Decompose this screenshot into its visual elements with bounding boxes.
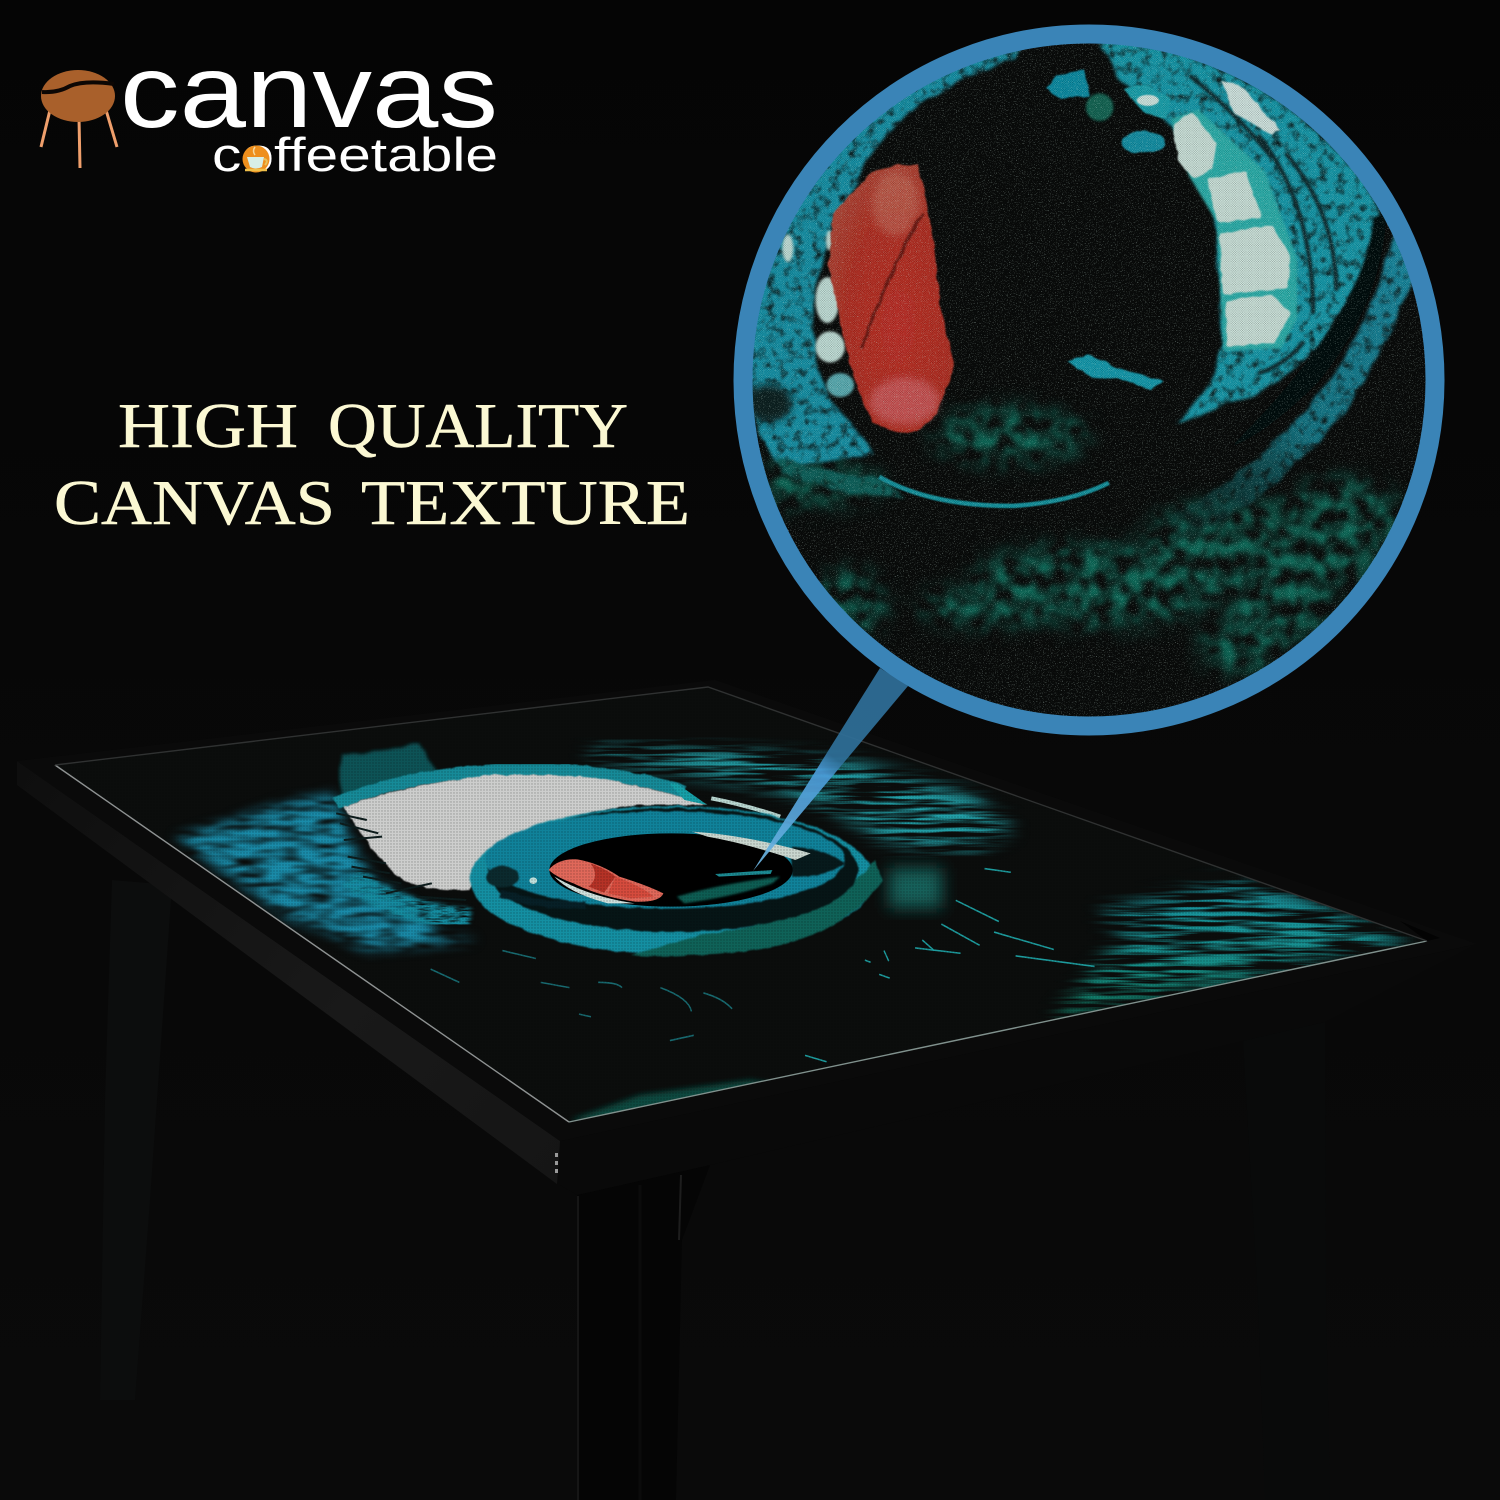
red tongue — [829, 165, 955, 433]
table leg: front — [577, 1165, 710, 1500]
dark streaks in right rim — [1189, 75, 1336, 374]
lens ring — [743, 34, 1435, 726]
heading line 2: CANVAS — [54, 467, 335, 538]
mint gaps behind teeth — [1171, 110, 1297, 351]
tongue pale highlight upper — [872, 172, 918, 236]
tongue pale edge — [554, 877, 635, 903]
table — [17, 680, 1477, 1500]
lens contents — [752, 44, 1426, 716]
table leg: back right — [1243, 1022, 1330, 1500]
green blob top — [1086, 93, 1113, 121]
iris inner band — [485, 811, 845, 909]
magnifier lens — [730, 20, 1450, 740]
cheek block — [889, 868, 942, 908]
fabric weave — [730, 20, 1450, 740]
frame corner rivets — [555, 1153, 558, 1173]
heading line 2 — [54, 467, 690, 538]
canvas tabletop print — [55, 687, 1427, 1122]
table frame top — [17, 680, 1477, 1141]
dark green lower patches — [735, 408, 1410, 672]
iris dark ring — [488, 808, 858, 932]
left teeth — [782, 230, 854, 397]
sclera edge lashes — [336, 813, 466, 900]
table apron — [560, 944, 1477, 1195]
upper lid teal — [336, 769, 684, 803]
highlights upper right — [1221, 82, 1281, 135]
reflected teeth highlight — [692, 832, 811, 860]
iris dark streaks — [501, 893, 585, 905]
reflected lower glint — [677, 877, 780, 903]
bean crease — [42, 82, 114, 92]
right teal streaks — [1053, 880, 1413, 1020]
logo icon: coffee cup — [242, 146, 270, 172]
bean table legs — [41, 110, 117, 168]
bottom thin arc — [879, 477, 1109, 506]
lens base — [749, 39, 1429, 719]
small teal blob top — [1047, 71, 1090, 99]
lower left teal fade — [776, 456, 904, 498]
bean — [41, 70, 115, 122]
right dark crescent — [1242, 214, 1384, 440]
left teal rim — [739, 43, 1024, 464]
left dark fleck — [746, 385, 792, 422]
logo icon: coffee bean table — [41, 70, 117, 168]
right lash marks — [805, 869, 1095, 1062]
heading line 1: HIGH — [118, 390, 298, 461]
lash marks — [431, 951, 732, 1041]
upper teal cluster with specks — [1123, 84, 1171, 119]
right teeth — [1176, 116, 1287, 344]
eye centre — [336, 769, 883, 956]
logo — [41, 34, 498, 181]
iris — [470, 806, 883, 956]
dark lid patch — [340, 745, 440, 800]
red tongue — [549, 859, 663, 902]
left blue skin area — [175, 794, 478, 950]
sclera — [344, 775, 707, 891]
iris outer ring — [470, 806, 874, 954]
heading line 1: QUALITY — [328, 390, 628, 461]
canvas edge highlights — [55, 687, 1427, 1122]
outer teal arc — [1171, 217, 1414, 532]
center teal glint — [1068, 354, 1164, 390]
logo wordmark: coffeetable: coffeetable — [212, 128, 498, 181]
heading — [54, 390, 690, 538]
pupil — [549, 833, 793, 907]
heading line 2: TEXTURE — [361, 467, 690, 538]
tongue crease — [861, 213, 923, 348]
fabric specks — [745, 36, 1433, 724]
printed eye artwork — [175, 745, 1413, 1122]
iris dark fleck — [487, 866, 519, 887]
heading line 1 — [118, 390, 628, 461]
upper right lash band — [585, 748, 1013, 850]
lower lid teal — [351, 877, 470, 920]
callout pointer — [753, 668, 908, 871]
right teal rim — [1097, 38, 1382, 423]
logo wordmark: canvas: canvas — [120, 34, 498, 150]
canvas weave texture — [55, 687, 1427, 1122]
bottom green edge — [570, 1080, 780, 1122]
table leg: back left — [100, 880, 172, 1400]
frame right corner slot — [1400, 921, 1440, 941]
tongue pale highlight lower — [870, 378, 939, 424]
table frame left face — [17, 761, 560, 1184]
